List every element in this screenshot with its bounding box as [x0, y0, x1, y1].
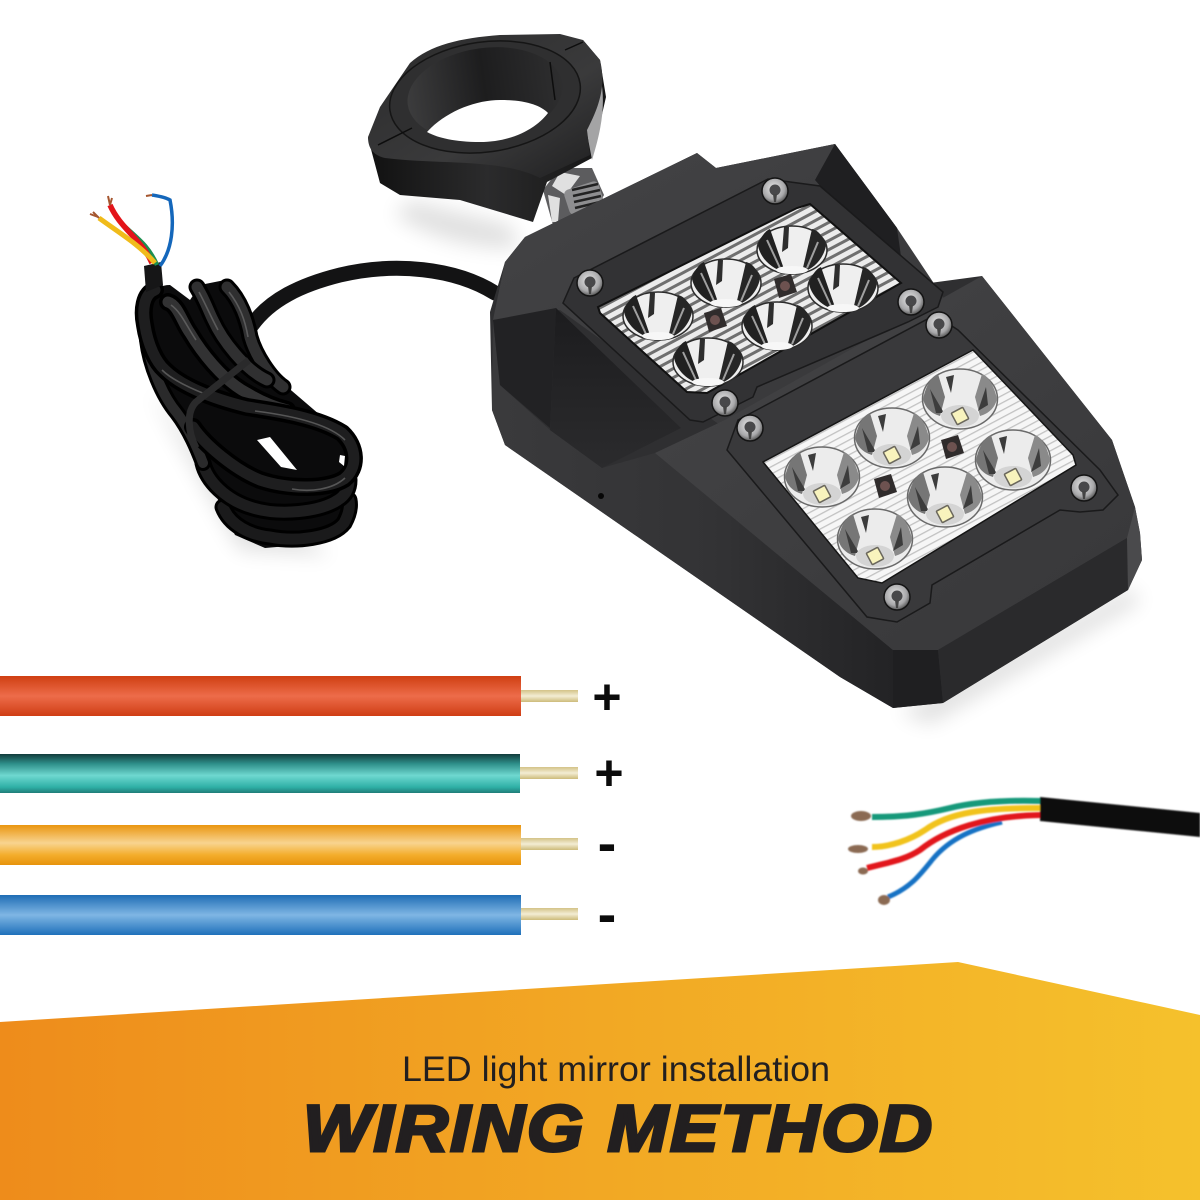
blue wire	[152, 195, 172, 266]
stripped cable photo	[848, 797, 1200, 905]
clamp body side	[368, 40, 606, 222]
lower left wall	[492, 320, 893, 708]
wire: teal positive: +	[594, 745, 624, 801]
upper screws	[577, 178, 924, 416]
soft ground shadows	[150, 200, 1140, 724]
left triangular facet	[493, 308, 556, 428]
title: WIRING METHOD	[303, 1091, 932, 1165]
clamp split lines	[378, 42, 583, 145]
copper tips	[848, 811, 890, 905]
lower bezel	[727, 315, 1118, 622]
cable coil strands	[144, 287, 354, 539]
cable coil mass	[142, 280, 358, 548]
lamp front right wall	[938, 538, 1128, 703]
upper sensor chips	[704, 274, 797, 332]
wire diagram	[0, 669, 624, 945]
lower light module	[727, 312, 1118, 622]
blue conductor	[888, 822, 1002, 897]
product: LED mirror lamp	[490, 144, 1142, 708]
upper bezel	[563, 179, 943, 422]
lower lenses	[784, 369, 1050, 569]
red wire	[110, 205, 152, 263]
lower finned panel	[763, 350, 1076, 583]
clamp right side sheen	[586, 55, 603, 160]
left dark facet	[550, 308, 681, 468]
wire: red positive: +	[592, 669, 622, 725]
cable sheath	[1040, 797, 1200, 837]
wire: blue negative: -	[598, 882, 616, 945]
banner shape	[0, 962, 1200, 1200]
lamp upper top face	[493, 144, 945, 425]
lower housing top face	[655, 276, 1135, 650]
footer banner	[0, 962, 1200, 1200]
product: coiled power cable with wires	[90, 195, 495, 548]
wire: teal positive	[0, 745, 624, 801]
green conductor	[872, 801, 1040, 817]
cable highlights	[162, 292, 345, 490]
clamp bolt and nut	[543, 168, 605, 225]
clamp ring	[382, 29, 588, 165]
upper finned panel	[598, 204, 901, 393]
clamp top face	[368, 34, 602, 178]
clamp opening	[427, 100, 548, 142]
lamp right corner cap	[1127, 507, 1142, 590]
wire: blue negative	[0, 882, 616, 945]
lower sensor chips	[874, 435, 964, 498]
lamp front centre wall	[893, 650, 943, 708]
wire: red positive	[0, 669, 622, 725]
upper lenses	[623, 226, 878, 386]
cable running to the lamp	[252, 268, 495, 325]
product: mounting clamp	[368, 29, 606, 225]
lower screws	[737, 312, 1097, 610]
lamp upper right facet	[815, 144, 905, 285]
red conductor	[867, 815, 1040, 868]
copper strands	[90, 195, 152, 218]
green wire	[122, 224, 157, 265]
yellow conductor	[872, 808, 1040, 847]
cable sheath end	[144, 262, 163, 292]
lamp silhouette	[490, 144, 1142, 708]
clamp inner wall	[401, 38, 569, 150]
mounting hole	[598, 493, 604, 499]
wire: orange negative	[0, 811, 616, 874]
yellow wire	[99, 218, 155, 263]
wire: orange negative: -	[598, 811, 616, 874]
subtitle: LED light mirror installation	[402, 1050, 830, 1089]
cable tie	[189, 360, 249, 448]
coil gaps	[257, 437, 345, 470]
upper light module	[563, 178, 943, 422]
